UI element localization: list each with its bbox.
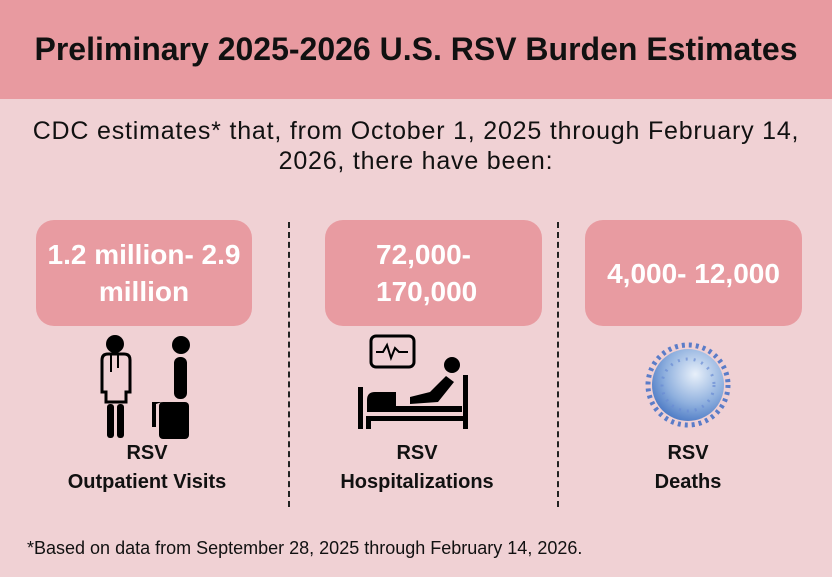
box: hospitalizations: 72,000- [376, 239, 471, 270]
subtitle [33, 117, 799, 175]
divider [557, 222, 559, 507]
label: hospitalizations: Hospitalizations [340, 471, 494, 493]
label: outpatient: Outpatient Visits [68, 471, 226, 493]
subtitle: CDC estimates* that, from October 1, 2025 through February 14, [33, 117, 799, 145]
box: deaths [585, 220, 802, 326]
footnote: *Based on data from September 28, 2025 through February 14, 2026. [27, 538, 582, 558]
box: outpatient [36, 220, 252, 326]
divider [288, 222, 290, 507]
label: hospitalizations: RSV [396, 442, 438, 464]
label: hospitalizations [340, 442, 494, 493]
box: deaths: 4,000- 12,000 [607, 258, 780, 288]
label: deaths [655, 442, 721, 493]
box: outpatient: 1.2 million- 2.9 [48, 239, 240, 270]
icon: virus [646, 342, 730, 428]
box: hospitalizations: 170,000 [376, 276, 477, 307]
icon: hospital bed [358, 334, 468, 429]
title: Preliminary 2025-2026 U.S. RSV Burden Estimates [34, 31, 798, 67]
subtitle: 2026, there have been: [279, 147, 553, 175]
header band [0, 0, 832, 99]
label: deaths: Deaths [655, 471, 721, 493]
label: outpatient: RSV [126, 442, 168, 464]
label: outpatient [68, 442, 226, 493]
label: deaths: RSV [667, 442, 709, 464]
box: hospitalizations [325, 220, 542, 326]
box: outpatient: million [99, 276, 189, 307]
icon: doctor and patient [100, 335, 190, 439]
